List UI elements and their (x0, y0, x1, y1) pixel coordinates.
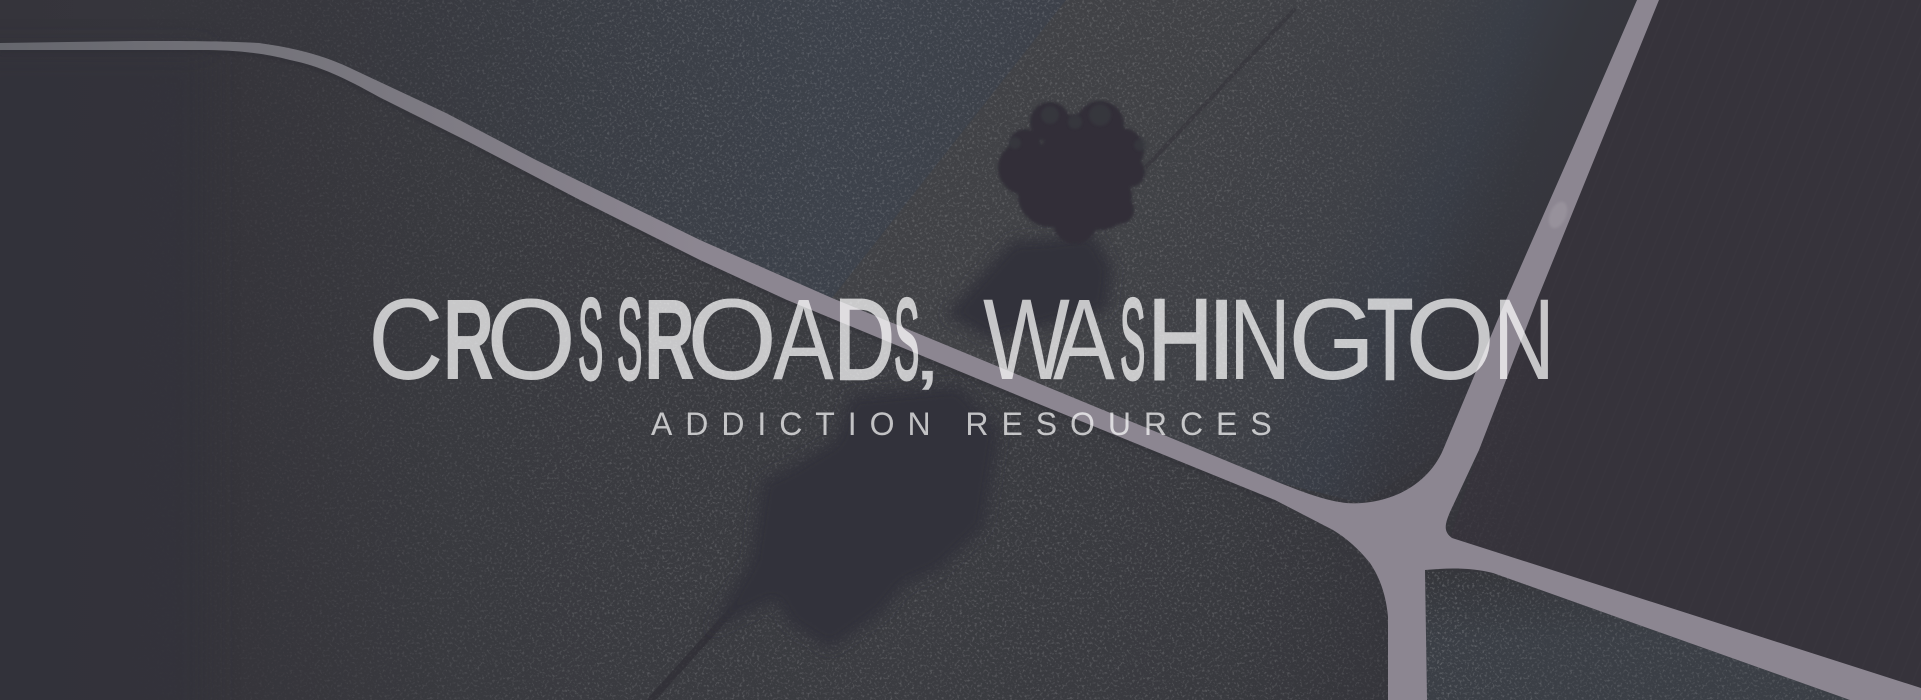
tree shadow on lower field (708, 385, 1000, 650)
title: R (443, 276, 494, 404)
field: right crop rows (1450, 0, 1921, 690)
title: N (1493, 276, 1555, 404)
road edge shadow (0, 51, 1275, 501)
title: G (1288, 276, 1376, 404)
title: S (1120, 276, 1145, 404)
road highlight spot (1545, 199, 1571, 231)
title: I (1206, 276, 1238, 404)
title: R (644, 276, 695, 404)
title: O (1405, 276, 1496, 404)
title: C (368, 276, 443, 404)
field track lines (651, 10, 1294, 700)
bottom right texture (1425, 570, 1855, 700)
title: O (486, 276, 577, 404)
title: H (1148, 276, 1212, 404)
title: A (773, 276, 834, 404)
title: O (687, 276, 778, 404)
title: S (894, 276, 919, 404)
tree (998, 101, 1146, 244)
title: A (1053, 276, 1115, 404)
title: , (912, 307, 943, 397)
title: N (1229, 276, 1291, 404)
left vignette (0, 50, 210, 700)
title: T (1366, 276, 1413, 404)
title: W (983, 276, 1070, 404)
field: upper left (0, 0, 1066, 298)
title: S (578, 276, 603, 404)
field: upper centre (832, 0, 1640, 503)
subtitle: ADDICTION RESOURCES (651, 406, 1285, 442)
tree shadow on upper field (945, 233, 1113, 340)
field texture (256, 0, 1478, 700)
title: D (834, 276, 895, 404)
field: bottom right (1425, 570, 1850, 700)
title: S (616, 276, 642, 404)
